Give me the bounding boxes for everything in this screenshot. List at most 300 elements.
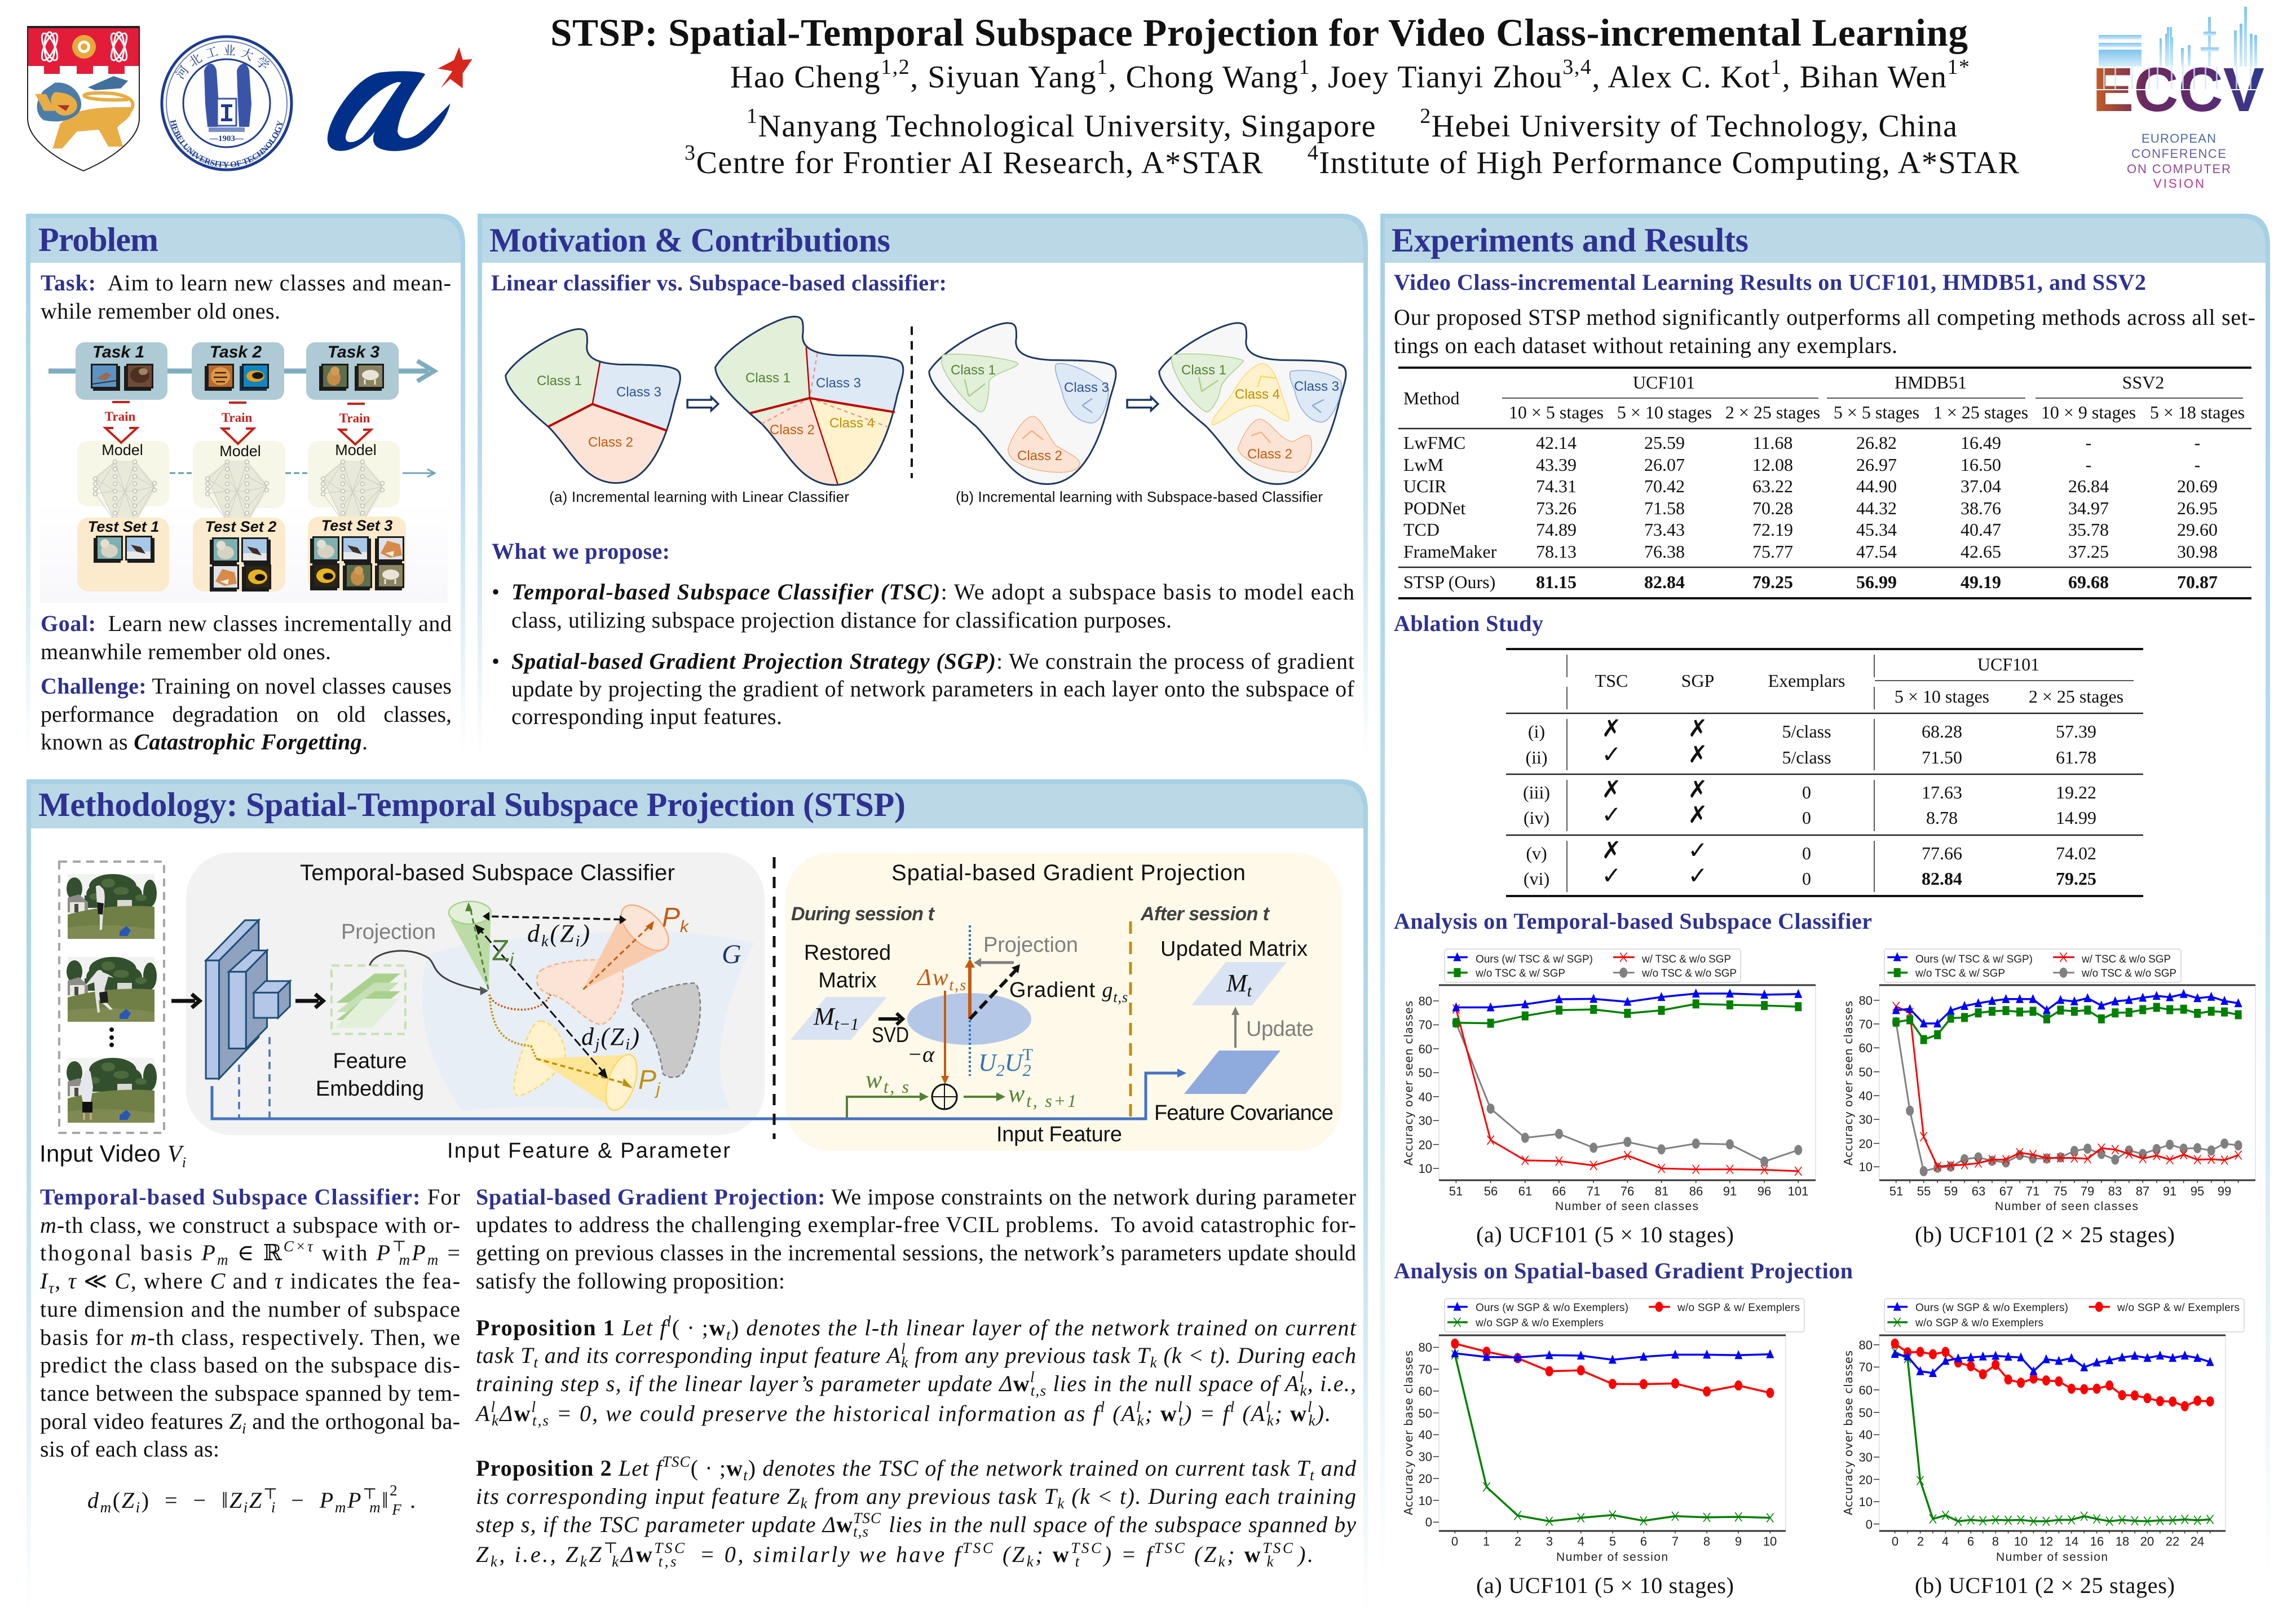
diagram: gradient projection: Gradient g [1009, 978, 1112, 1002]
chart: TSC accuracy UCF101 5x10: 96 [1758, 1184, 1771, 1198]
affiliations: 3 [685, 141, 695, 165]
logo: ECCV: VISION [2153, 176, 2204, 191]
chart: SGP accuracy UCF101 2x25: 80 [1859, 1338, 1873, 1352]
chart: TSC accuracy UCF101 5x10: 10 [1419, 1162, 1432, 1176]
table: class-incremental results: 26.97 [1856, 454, 1897, 475]
figure: task sequence: Test Set 1 [88, 518, 159, 535]
legend: TSC chart a: w/ TSC & w/o SGP [1641, 954, 1731, 965]
table: class-incremental results: 26.82 [1856, 433, 1897, 453]
text: goal: Goal: Learn new classes incrementally and [41, 611, 452, 636]
chart: TSC accuracy UCF101 5x10 [1402, 949, 1816, 1213]
table: ablation study: 0 [1802, 843, 1811, 863]
chart: SGP accuracy UCF101 2x25: 24 [2191, 1534, 2204, 1548]
table: class-incremental results: 1 × 25 stages [1933, 402, 2028, 422]
table: class-incremental results: 42.65 [1961, 541, 2001, 562]
table: class-incremental results: 20.69 [2177, 476, 2218, 496]
figure: linear vs subspace classifier: Class 3 [1064, 380, 1109, 395]
list: contributions: Spatial-based Gradient Projection Strategy (SGP): We constrain the process of gradient [511, 648, 1354, 674]
table: class-incremental results: 47.54 [1856, 541, 1897, 562]
chart: SGP accuracy UCF101 5x10: 20 [1419, 1472, 1432, 1486]
logo: A*STAR [328, 47, 473, 151]
text: proposition 2: Δ [620, 1542, 634, 1567]
chart: SGP accuracy UCF101 5x10: 9 [1735, 1534, 1742, 1548]
table: class-incremental results: 73.43 [1644, 519, 1685, 540]
text: proposition 2: = 0, similarly we have f [692, 1542, 963, 1567]
diagram: updated matrix: Feature Covariance [1154, 1101, 1334, 1125]
diagram: updated matrix: Updated Matrix [1160, 937, 1308, 961]
diagram: gradient projection: t,s [949, 977, 966, 994]
table: class-incremental results: SSV2 [2122, 372, 2164, 392]
chart: TSC accuracy UCF101 2x25: 30 [1859, 1113, 1873, 1127]
arrows: network input and output [171, 994, 323, 1008]
chart: TSC accuracy UCF101 5x10: 70 [1419, 1018, 1432, 1032]
chart: TSC accuracy UCF101 2x25: 71 [2026, 1184, 2039, 1198]
text: proposition 1: ; [1275, 1401, 1289, 1426]
legend: SGP chart a: w/o SGP & w/ Exemplers [1677, 1302, 1800, 1314]
diagram: updated matrix: M [1226, 969, 1247, 997]
figure: task sequence: Train [222, 411, 252, 425]
formula: subspace distance: . [403, 1488, 416, 1513]
text: proposition 1: = 0, we could preserve the historical information as f [550, 1401, 1102, 1426]
panel: problem [26, 214, 465, 759]
text: proposition 2: t [1075, 1553, 1080, 1570]
chart: TSC accuracy UCF101 2x25: 99 [2218, 1184, 2231, 1198]
text: proposition 2: k [1057, 1495, 1065, 1512]
chart: SGP accuracy UCF101 2x25: Number of session [1996, 1551, 2108, 1564]
text: results summary [1394, 304, 2255, 358]
formula: subspace distance: Z [229, 1488, 242, 1513]
legend: SGP chart b: w/o SGP & w/o Exemplers [1915, 1317, 2043, 1329]
table: ablation study: 5/class [1782, 721, 1831, 742]
text: proposition 1: t [533, 1354, 538, 1371]
text: proposition 1: l [1030, 1369, 1034, 1385]
diagram: subspace geometry: k [541, 933, 549, 950]
chart: SGP accuracy UCF101 2x25: 50 [1859, 1406, 1873, 1420]
legend: TSC chart a: w/o TSC & w/ SGP [1475, 968, 1565, 979]
text: temporal-based subspace classifier: sis of each class as: [40, 1436, 219, 1462]
text: proposition 1: (A [1106, 1401, 1136, 1426]
legend: TSC chart a: w/o TSC & w/o SGP [1641, 968, 1737, 979]
text: proposition 2: w [726, 1455, 743, 1481]
text: proposition 2: its corresponding input feature Z [476, 1484, 800, 1509]
chart: SGP accuracy UCF101 5x10: 30 [1419, 1450, 1432, 1464]
formula: subspace distance: Z [122, 1488, 135, 1513]
logo: ECCV: CONFERENCE [2131, 147, 2226, 161]
chart: SGP accuracy UCF101 2x25: 60 [1859, 1383, 1873, 1397]
chart: TSC accuracy UCF101 2x25: 79 [2081, 1184, 2094, 1198]
legend: TSC chart a [1445, 949, 1741, 982]
text: proposition 1: Δ [498, 1401, 513, 1426]
legend: SGP chart a: w/o SGP & w/o Exemplers [1475, 1317, 1604, 1329]
table: ablation study: 74.02 [2056, 843, 2096, 863]
diagram: gradient projection: −α [907, 1042, 935, 1067]
diagram: subspace geometry: (Z [550, 920, 574, 947]
figure: linear vs subspace classifier: Class 2 [1247, 447, 1292, 462]
text: goal [41, 611, 452, 664]
subheading: results: Video Class-incremental Learning Results on UCF101, HMDB51, and SSV2 [1394, 270, 2146, 295]
panel: temporal-based subspace classifier: Feature [333, 1049, 407, 1073]
text: task: Task: Aim to learn new classes and mean- [41, 270, 451, 295]
chart: SGP accuracy UCF101 2x25: 20 [2140, 1534, 2154, 1548]
label: input feature: Input Feature [996, 1123, 1122, 1146]
chart: SGP accuracy UCF101 5x10: 10 [1419, 1494, 1432, 1508]
formula: subspace distance: P [319, 1488, 333, 1513]
diagram: gradient projection: U [1005, 1049, 1025, 1076]
text: proposition 1: ) [731, 1315, 745, 1340]
text: proposition 2: step s, if the TSC parameter update Δw [476, 1512, 853, 1537]
text: challenge: performance degradation on old classes, [41, 701, 452, 727]
diagram: gradient projection: Δw [917, 965, 948, 991]
label: after session: After session t [1140, 903, 1270, 925]
text: spatial-based gradient projection: updates to address the challenging exemplar-free VCIL problems. To avoid catastrophic for- [476, 1212, 1356, 1237]
text: proposition 1 [474, 1313, 1357, 1429]
logo: Hebei University of Technology seal: HEBEI UNIVERSITY OF TECHNOLOGY [170, 120, 283, 167]
figure: linear vs subspace classifier [497, 314, 1346, 505]
legend: TSC chart b [1884, 949, 2181, 982]
caption: TSC chart b: (b) UCF101 (2 × 25 stages) [1915, 1222, 2175, 1247]
chart: TSC accuracy UCF101 2x25: 55 [1917, 1184, 1931, 1198]
diagram: restored matrix: M [814, 1003, 834, 1030]
label: during session: During session t [791, 903, 935, 925]
caption: SGP chart a: (a) UCF101 (5 × 10 stages) [1476, 1573, 1734, 1598]
diagram: updated matrix [1154, 937, 1334, 1125]
text: temporal-based subspace classifier: m [217, 1251, 228, 1268]
text: proposition 1: from any previous task T [908, 1343, 1151, 1368]
table: ablation study: 0 [1802, 807, 1811, 828]
label: input video: Input Video V [39, 1140, 182, 1167]
diagram: subspace geometry [370, 901, 754, 1111]
subheading: ablation study: Ablation Study [1394, 611, 1543, 636]
table: class-incremental results: 5 × 18 stages [2150, 402, 2245, 422]
chart: TSC accuracy UCF101 2x25: Number of seen classes [1995, 1200, 2138, 1213]
table: class-incremental results: 82.84 [1644, 572, 1685, 592]
chart: TSC accuracy UCF101 2x25: 87 [2136, 1184, 2149, 1198]
chart: TSC accuracy UCF101 2x25: 91 [2163, 1184, 2176, 1198]
chart: TSC accuracy UCF101 2x25: 70 [1859, 1017, 1873, 1031]
text: proposition 1: l [1230, 1398, 1234, 1415]
table: class-incremental results: 44.90 [1856, 476, 1897, 496]
table: class-incremental results: 70.87 [2177, 572, 2218, 592]
formula: subspace distance: − [277, 1488, 318, 1513]
table: class-incremental results: - [2086, 433, 2091, 453]
logo: Hebei University of Technology seal: —1903— [209, 134, 244, 143]
chart: SGP accuracy UCF101 5x10 [1402, 1299, 1804, 1564]
heading: motivation: Motivation & Contributions [489, 222, 890, 259]
chart: TSC accuracy UCF101 2x25: 83 [2108, 1184, 2122, 1198]
figure: task sequence: Test Set 3 [321, 517, 392, 534]
table: ablation study: (vi) [1524, 868, 1549, 889]
text: proposition 2: Proposition 2 Let f [476, 1455, 662, 1481]
table: class-incremental results: 26.07 [1644, 454, 1685, 475]
text: proposition 1: l [531, 1398, 536, 1415]
chart: TSC accuracy UCF101 2x25: 63 [1972, 1184, 1985, 1198]
table: ablation study: 61.78 [2056, 747, 2096, 767]
formula: subspace distance: ‖ [382, 1488, 388, 1513]
diagram: gradient projection: T [1023, 1045, 1033, 1064]
figure: linear vs subspace classifier: Class 2 [770, 422, 815, 438]
panel: experiments and results [1380, 214, 2270, 1616]
chart: SGP accuracy UCF101 5x10: 8 [1703, 1534, 1710, 1548]
authors: 1 [1097, 55, 1107, 79]
formula: subspace distance: i [271, 1499, 275, 1516]
text: temporal-based subspace classifier: basis for m-th class, respectively. Then, we [40, 1325, 460, 1350]
diagram: restored matrix: t−1 [834, 1015, 859, 1034]
text: temporal-based subspace classifier: m-th class, we construct a subspace with or- [40, 1212, 460, 1238]
chart: SGP accuracy UCF101 2x25: 0 [1866, 1517, 1873, 1532]
table: ablation study: 68.28 [1922, 721, 1962, 742]
list: contributions: update by projecting the gradient of network parameters in each layer onto the subspace of [511, 676, 1355, 701]
text: proposition 1: k [1300, 1382, 1307, 1399]
chart: SGP accuracy UCF101 2x25: 2 [1917, 1534, 1924, 1548]
label: input feature and parameter: Input Feature & Parameter [447, 1139, 730, 1163]
table: class-incremental results: 44.32 [1856, 498, 1897, 518]
figure: linear vs subspace classifier: Class 2 [588, 435, 633, 450]
text: proposition 2: denotes the TSC of the network trained on current task T [762, 1455, 1311, 1481]
diagram: subspace geometry: d [581, 1023, 594, 1051]
panel: temporal-based subspace classifier [171, 853, 765, 1135]
formula: subspace distance: m [335, 1499, 346, 1516]
text: temporal-based subspace classifier: predict the class based on the subspace dis- [40, 1352, 460, 1378]
chart: TSC accuracy UCF101 5x10: 60 [1419, 1042, 1432, 1056]
table: class-incremental results: - [2195, 454, 2200, 475]
chart: SGP accuracy UCF101 2x25: 10 [1859, 1495, 1873, 1509]
logo: ECCV: EUROPEAN [2142, 131, 2216, 145]
diagram: gradient projection: U [978, 1049, 996, 1076]
text: results summary: tings on each dataset without retaining any exemplars. [1394, 333, 1897, 358]
diagram: restored matrix: SVD [872, 1023, 909, 1047]
panel: spatial-based gradient projection [785, 853, 1341, 1151]
chart: TSC accuracy UCF101 5x10: 30 [1419, 1114, 1432, 1128]
text: proposition 1: l [1266, 1398, 1270, 1415]
table: class-incremental results: LwFMC [1403, 433, 1465, 453]
table: ablation study: ✗ [1688, 740, 1708, 768]
table: ablation study: ✓ [1601, 862, 1622, 889]
table: ablation study: 14.99 [2056, 807, 2096, 828]
table: ablation study: UCF101 [1977, 654, 2039, 674]
figure: linear vs subspace classifier: Class 1 [537, 373, 582, 389]
text: proposition 1: (A [1235, 1401, 1265, 1426]
text: temporal-based subspace classifier: τ ≪ C, where C and τ indicates the fea- [68, 1268, 460, 1294]
text: challenge [41, 673, 452, 754]
legend: SGP chart a [1445, 1299, 1804, 1332]
chart: TSC accuracy UCF101 2x25 [1842, 949, 2255, 1213]
table: class-incremental results: 26.84 [2068, 476, 2109, 496]
table: class-incremental results: - [2086, 454, 2091, 475]
table: class-incremental results: 74.89 [1536, 519, 1577, 540]
table: class-incremental results [1398, 368, 2251, 598]
text: temporal-based subspace classifier: τ [48, 1279, 55, 1296]
list: contributions: • [492, 579, 500, 604]
formula: subspace distance: i [244, 1499, 248, 1516]
text: proposition 1: Proposition 1 Let f [476, 1315, 666, 1340]
logo: Hebei University of Technology seal: 河北工业大学 [175, 45, 270, 79]
table: class-incremental results: 76.38 [1644, 541, 1685, 562]
text: proposition 2: k [1267, 1553, 1274, 1570]
diagram: subspace geometry: j [654, 1080, 661, 1098]
figure: task sequence: Model [101, 442, 143, 458]
diagram: subspace geometry: ) [629, 1023, 639, 1051]
diagram: updated matrix: Update [1246, 1017, 1314, 1041]
authors: , Alex C. Kot [1592, 60, 1770, 95]
figure: linear vs subspace classifier: Class 3 [816, 376, 861, 391]
chart: SGP accuracy UCF101 2x25: 0 [1892, 1534, 1898, 1548]
table: class-incremental results: 5 × 10 stages [1617, 402, 1712, 422]
diagram: subspace geometry: j [593, 1036, 599, 1053]
heading: experiments: Experiments and Results [1392, 222, 1749, 259]
text: proposition 2: from any previous task T [808, 1484, 1058, 1509]
list: contributions: corresponding input features. [511, 704, 782, 729]
chart: SGP accuracy UCF101 2x25: 10 [2014, 1534, 2028, 1548]
legend: SGP chart b: Ours (w SGP & w/o Exemplers) [1915, 1302, 2068, 1314]
table: class-incremental results: 70.28 [1752, 498, 1793, 518]
table: class-incremental results: UCF101 [1633, 372, 1695, 392]
chart: SGP accuracy UCF101 5x10: 70 [1419, 1362, 1432, 1376]
chart: TSC accuracy UCF101 2x25: 10 [1859, 1160, 1873, 1174]
table: class-incremental results: 69.68 [2068, 572, 2109, 592]
label: SGP title: Spatial-based Gradient Projection [891, 860, 1246, 885]
figure: linear vs subspace classifier: (b) Incremental learning with Subspace-based Classifier [956, 488, 1323, 505]
formula: subspace distance: m [369, 1499, 381, 1516]
text: results summary: Our proposed STSP method significantly outperforms all competing methods across all set- [1394, 304, 2255, 330]
chart: SGP accuracy UCF101 2x25: Accuracy over base classes [1842, 1351, 1855, 1515]
chart: SGP accuracy UCF101 5x10: 50 [1419, 1406, 1432, 1420]
text: spatial-based gradient projection: Spatial-based Gradient Projection: We impose constraints on the network during parameter [476, 1184, 1356, 1210]
text: proposition 2: ; [1227, 1542, 1242, 1567]
text: spatial-based gradient projection: getting on previous classes in the incremental sessions, the network’s parameters update should [476, 1240, 1356, 1265]
logo: Hebei University of Technology seal [160, 35, 293, 171]
text: proposition 1: ( · ; [672, 1315, 708, 1340]
authors: , Chong Wang [1109, 60, 1298, 95]
authors: 1,2 [881, 55, 909, 79]
chart: TSC accuracy UCF101 5x10: 101 [1788, 1184, 1808, 1198]
table: class-incremental results: 73.26 [1536, 498, 1577, 518]
figure: linear vs subspace classifier: Class 1 [951, 363, 996, 378]
text: proposition 2: k [491, 1553, 498, 1570]
table: class-incremental results: 30.98 [2177, 541, 2218, 562]
text: temporal-based subspace classifier: poral video features Z [40, 1409, 242, 1434]
text: proposition 2: TSC [1154, 1539, 1185, 1556]
text: proposition 1: t,s [532, 1412, 549, 1429]
table: class-incremental results: 16.50 [1961, 454, 2001, 475]
label: TSC title: Temporal-based Subspace Classifier [300, 860, 675, 885]
table: class-incremental results: UCIR [1403, 476, 1447, 496]
chart: TSC accuracy UCF101 5x10: 91 [1723, 1184, 1737, 1198]
panel: methodology [27, 779, 1368, 1618]
authors: 3,4 [1562, 55, 1591, 79]
diagram: subspace geometry: k [680, 917, 690, 936]
formula: subspace distance: P [347, 1488, 361, 1513]
table: ablation study: 82.84 [1922, 868, 1962, 889]
legend: TSC chart b: w/o TSC & w/ SGP [1915, 968, 2005, 979]
table: class-incremental results: 78.13 [1536, 541, 1577, 562]
text: proposition 2: k [580, 1553, 588, 1570]
table: class-incremental results: 34.97 [2068, 498, 2109, 518]
formula: subspace distance: ) = − ‖ [142, 1488, 228, 1513]
table: class-incremental results: 71.58 [1644, 498, 1685, 518]
authors: Hao Cheng [730, 60, 880, 95]
table: ablation study: ✓ [1601, 801, 1622, 828]
legend: TSC chart b: w/o TSC & w/o SGP [2081, 968, 2176, 979]
legend: TSC chart b: Ours (w/ TSC & w/ SGP) [1915, 954, 2033, 965]
text: proposition 1: l [1308, 1398, 1312, 1415]
diagram: subspace geometry: P [662, 903, 680, 933]
text: proposition 1: k [492, 1412, 499, 1429]
chart: SGP accuracy UCF101 5x10: 4 [1578, 1534, 1584, 1548]
chart: TSC accuracy UCF101 2x25: 20 [1859, 1137, 1873, 1151]
text: spatial-based gradient projection [476, 1184, 1356, 1294]
figure: linear vs subspace classifier: Class 3 [1294, 379, 1339, 394]
text: proposition 2: TSC [853, 1510, 881, 1526]
chart: TSC accuracy UCF101 5x10: 20 [1419, 1138, 1432, 1152]
table: class-incremental results: 35.78 [2068, 519, 2109, 540]
subheading: spatial analysis: Analysis on Spatial-based Gradient Projection [1394, 1258, 1853, 1283]
table: ablation study: 57.39 [2056, 721, 2096, 742]
affiliations: 1 [747, 104, 757, 128]
chart: SGP accuracy UCF101 2x25: 14 [2065, 1534, 2078, 1548]
table: ablation study: ✓ [1688, 836, 1708, 864]
table: ablation study: ✓ [1688, 862, 1708, 889]
text: proposition 2: t [1310, 1467, 1315, 1484]
formula: subspace distance: m [100, 1499, 111, 1516]
chart: SGP accuracy UCF101 5x10: 0 [1451, 1534, 1458, 1548]
text: proposition 2: (Z [995, 1542, 1025, 1567]
table: ablation study: (iii) [1523, 782, 1550, 802]
chart: TSC accuracy UCF101 5x10: 80 [1419, 994, 1432, 1008]
text: spatial-based gradient projection: satisfy the following proposition: [476, 1268, 785, 1294]
figure: task sequence: Model [219, 443, 261, 460]
table: ablation study: (v) [1526, 843, 1547, 863]
text: proposition 1: w [514, 1401, 531, 1426]
chart: SGP accuracy UCF101 2x25: 6 [1967, 1534, 1974, 1548]
text: proposition 2: t,s [659, 1553, 677, 1570]
table: class-incremental results: 37.25 [2068, 541, 2109, 562]
figure: task sequence: Model [335, 442, 377, 458]
diagram: restored matrix: Matrix [818, 969, 877, 992]
table: class-incremental results: FrameMaker [1403, 541, 1497, 562]
diagram: restored matrix: Restored [804, 941, 891, 965]
subheading: classifier comparison: Linear classifier vs. Subspace-based classifier: [491, 270, 947, 295]
text: proposition 2: k [1027, 1553, 1034, 1570]
text: temporal-based subspace classifier [39, 1184, 460, 1462]
text: temporal-based subspace classifier: ⊤ [392, 1238, 407, 1255]
figure: task sequence: Task 1 [92, 343, 144, 361]
table: ablation study: ✗ [1688, 801, 1708, 828]
table: class-incremental results: LwM [1403, 454, 1443, 475]
table: class-incremental results: Method [1403, 388, 1460, 408]
table: class-incremental results: TCD [1403, 519, 1440, 540]
table: class-incremental results: 56.99 [1856, 572, 1897, 592]
text: proposition 1: l [1136, 1398, 1141, 1415]
text: proposition 2: ⊤ [603, 1539, 618, 1556]
diagram: subspace geometry: ) [580, 920, 590, 947]
affiliations [685, 104, 2020, 180]
subheading: temporal analysis: Analysis on Temporal-based Subspace Classifier [1394, 908, 1872, 934]
chart: SGP accuracy UCF101 5x10: 10 [1763, 1534, 1777, 1548]
text: task: while remember old ones. [41, 298, 280, 324]
chart: SGP accuracy UCF101 2x25: 22 [2166, 1534, 2179, 1548]
text: proposition 2: TSC [1262, 1539, 1293, 1556]
chart: TSC accuracy UCF101 5x10: 71 [1587, 1184, 1600, 1198]
table: ablation study: Exemplars [1768, 670, 1845, 691]
diagram: gradient projection: Projection [983, 933, 1078, 957]
text: temporal-based subspace classifier: m [399, 1251, 410, 1268]
table: ablation study: 71.50 [1922, 747, 1962, 767]
chart: SGP accuracy UCF101 2x25: 40 [1859, 1428, 1873, 1442]
chart: TSC accuracy UCF101 2x25: 59 [1944, 1184, 1958, 1198]
text: proposition 1: k [1137, 1412, 1145, 1429]
diagram: restored matrix [791, 941, 909, 1047]
diagram: subspace geometry: i [625, 1036, 630, 1053]
